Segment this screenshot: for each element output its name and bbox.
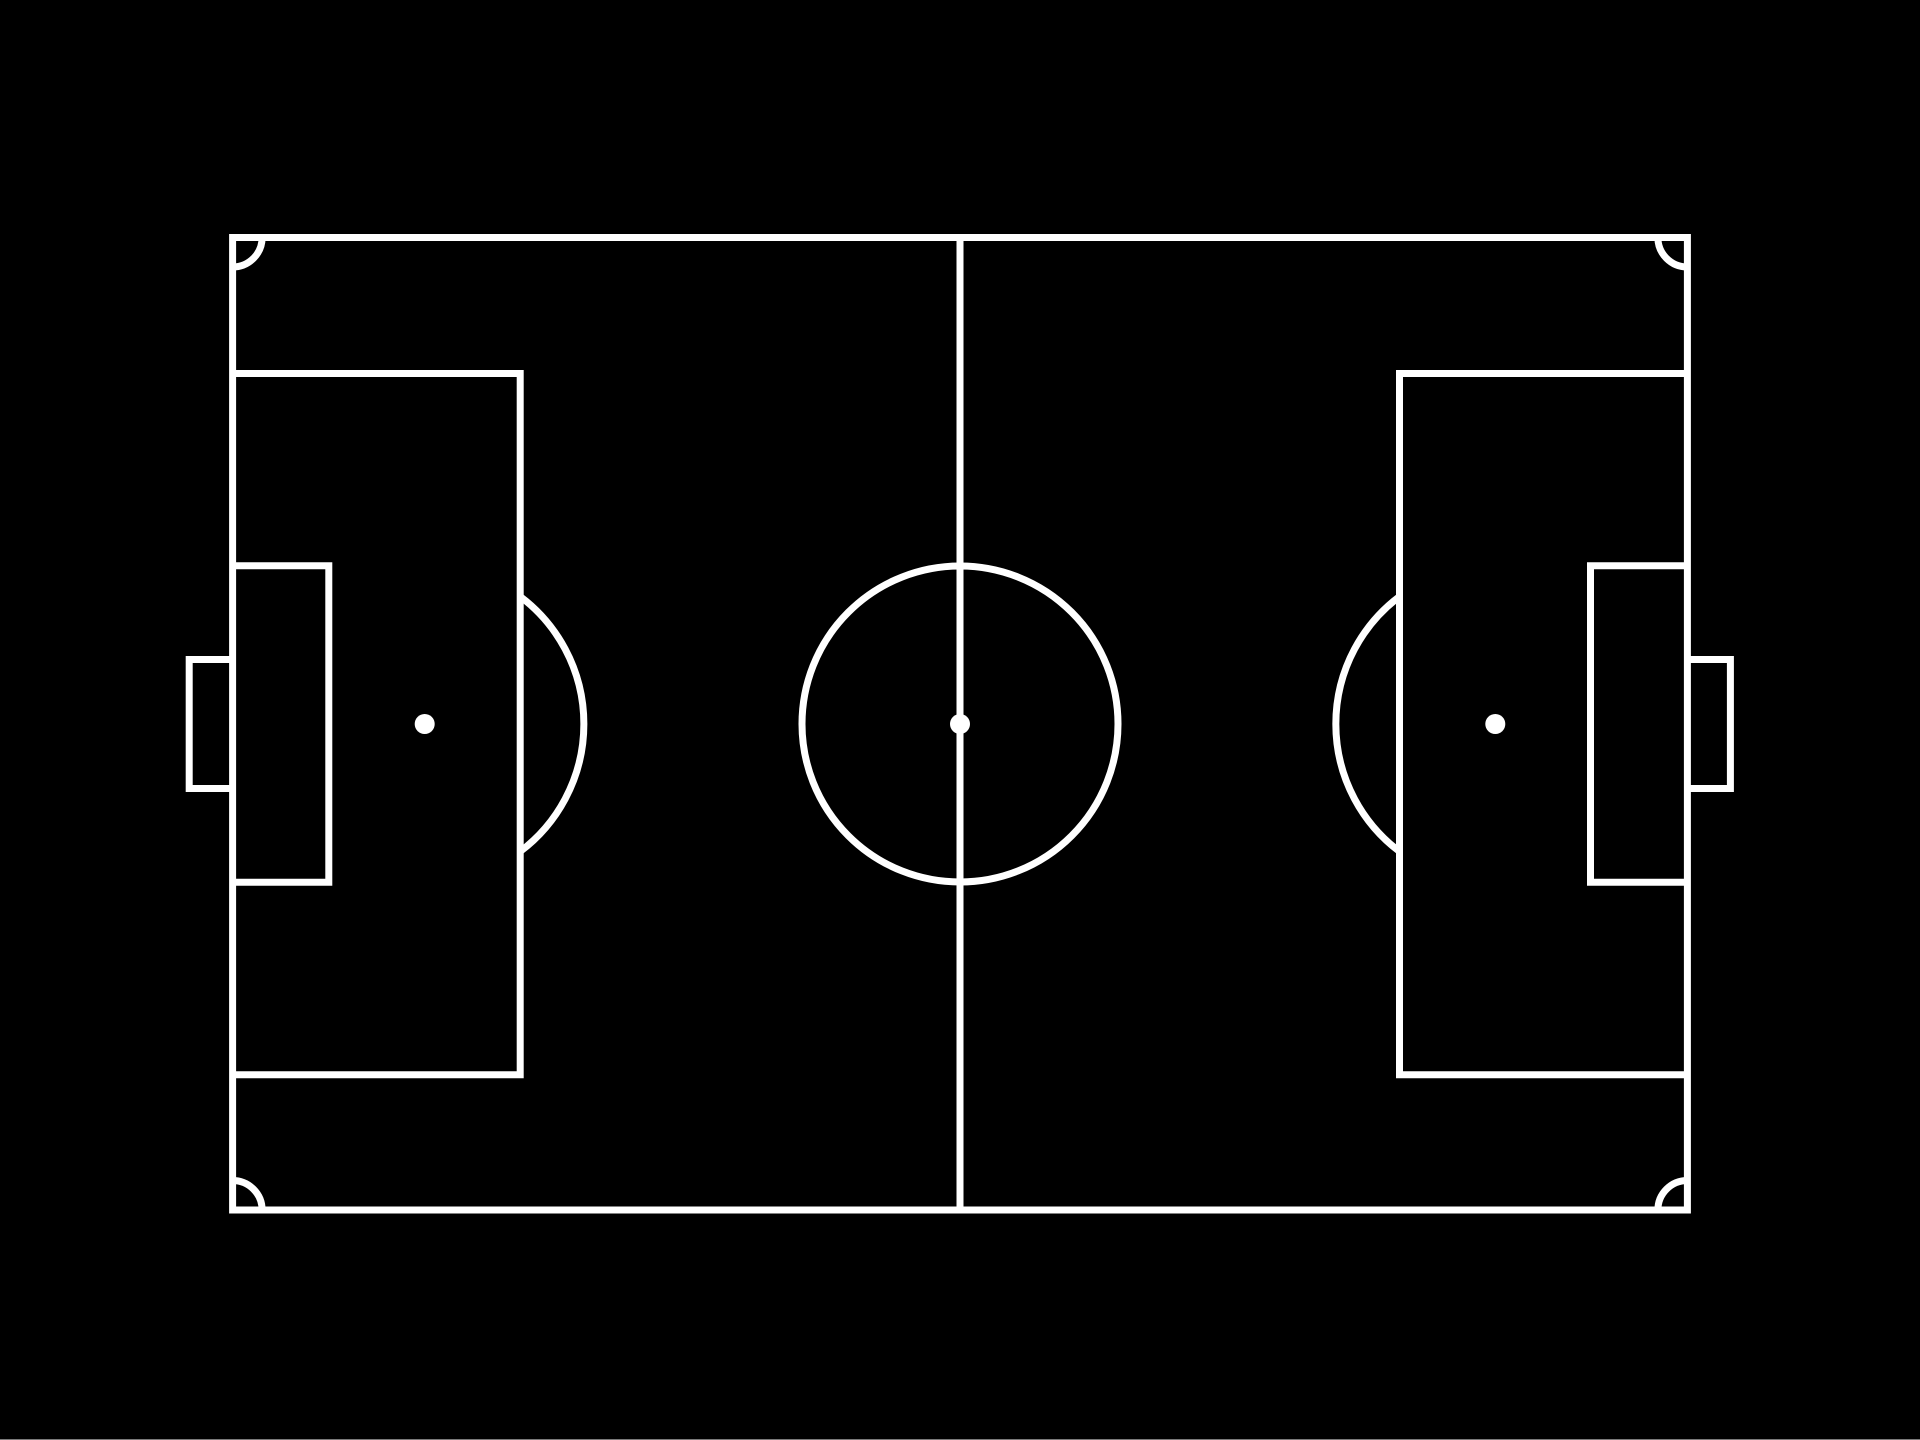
corner arc: bottom left — [233, 1180, 262, 1210]
left penalty spot — [415, 714, 435, 734]
left penalty arc — [520, 596, 584, 852]
right penalty area — [1400, 374, 1687, 1075]
left goal area — [233, 566, 329, 882]
corner arc: bottom right — [1658, 1180, 1687, 1210]
centre circle — [802, 566, 1118, 882]
corner arc: top right — [1658, 238, 1687, 267]
halfway line — [956, 238, 964, 1210]
pitch markings — [189, 238, 1730, 1210]
right penalty spot — [1485, 714, 1505, 734]
pitch boundary — [233, 238, 1687, 1210]
right goal area — [1590, 566, 1687, 882]
left goal — [189, 660, 233, 788]
left penalty area — [233, 374, 520, 1075]
right penalty arc — [1336, 596, 1400, 852]
corner arc: top left — [233, 238, 262, 267]
centre spot — [950, 714, 970, 734]
right goal — [1687, 660, 1730, 788]
